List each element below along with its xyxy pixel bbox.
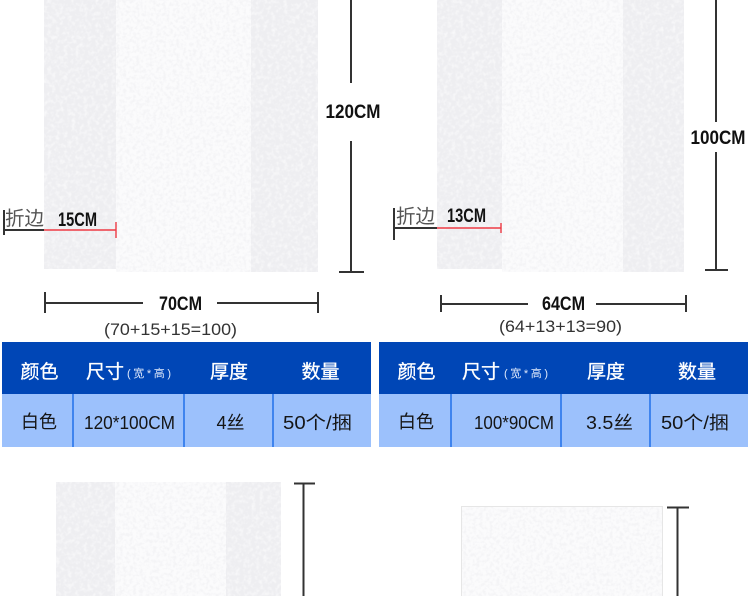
table: left specs: 白色: [21, 412, 57, 432]
fold label: 15CM: 折边: [5, 208, 44, 230]
height dimension: 100CM: [690, 0, 746, 270]
table: right specs: 尺寸: [462, 361, 500, 383]
fold label: 15CM: [4, 208, 116, 238]
table: left specs: 颜色: [20, 361, 59, 383]
panel: top right bag: [437, 0, 684, 272]
table: right specs: 厚度: [587, 361, 625, 383]
height dimension: bottom left: [294, 484, 315, 596]
table: right specs: (宽*高): [504, 366, 548, 380]
table: right specs: 100*90CM: [474, 413, 554, 433]
table: right specs: 50个/捆: [661, 413, 729, 433]
table: left specs: (宽*高): [127, 366, 171, 380]
table: left specs: 4丝: [216, 413, 245, 433]
table: left specs: 120*100CM: [84, 413, 175, 433]
height dimension: 120CM: 120CM: [326, 101, 380, 123]
formula: 70+15+15=100: (70+15+15=100): [104, 320, 237, 339]
table: left specs: 尺寸: [86, 361, 124, 383]
table: right specs: 白色: [398, 412, 434, 432]
width dimension: 64CM: [441, 293, 686, 315]
table: left specs: [2, 342, 371, 447]
panel: bottom left bag: [56, 482, 281, 596]
table: right specs: 3.5丝: [586, 413, 633, 433]
table: right specs: [379, 342, 748, 447]
fold label: 13CM: [394, 205, 501, 240]
width dimension: 70CM: 70CM: [159, 293, 202, 315]
panel: top left bag: [44, 0, 318, 272]
table: left specs: 50个/捆: [283, 413, 352, 433]
table: left specs: 数量: [301, 361, 340, 383]
width dimension: 64CM: 64CM: [542, 293, 585, 315]
width dimension: 70CM: [45, 292, 318, 315]
panel: bottom right bag: [461, 506, 663, 596]
fold label: 15CM: 15CM: [58, 209, 97, 231]
table: left specs: 厚度: [210, 361, 248, 383]
height dimension: bottom right: [667, 508, 689, 596]
fold label: 13CM: 13CM: [447, 205, 486, 227]
table: right specs: 颜色: [397, 361, 436, 383]
table: right specs: 数量: [678, 361, 716, 383]
formula: 64+13+13=90: (64+13+13=90): [499, 317, 622, 336]
fold label: 13CM: 折边: [396, 206, 435, 228]
height dimension: 120CM: [326, 0, 380, 272]
